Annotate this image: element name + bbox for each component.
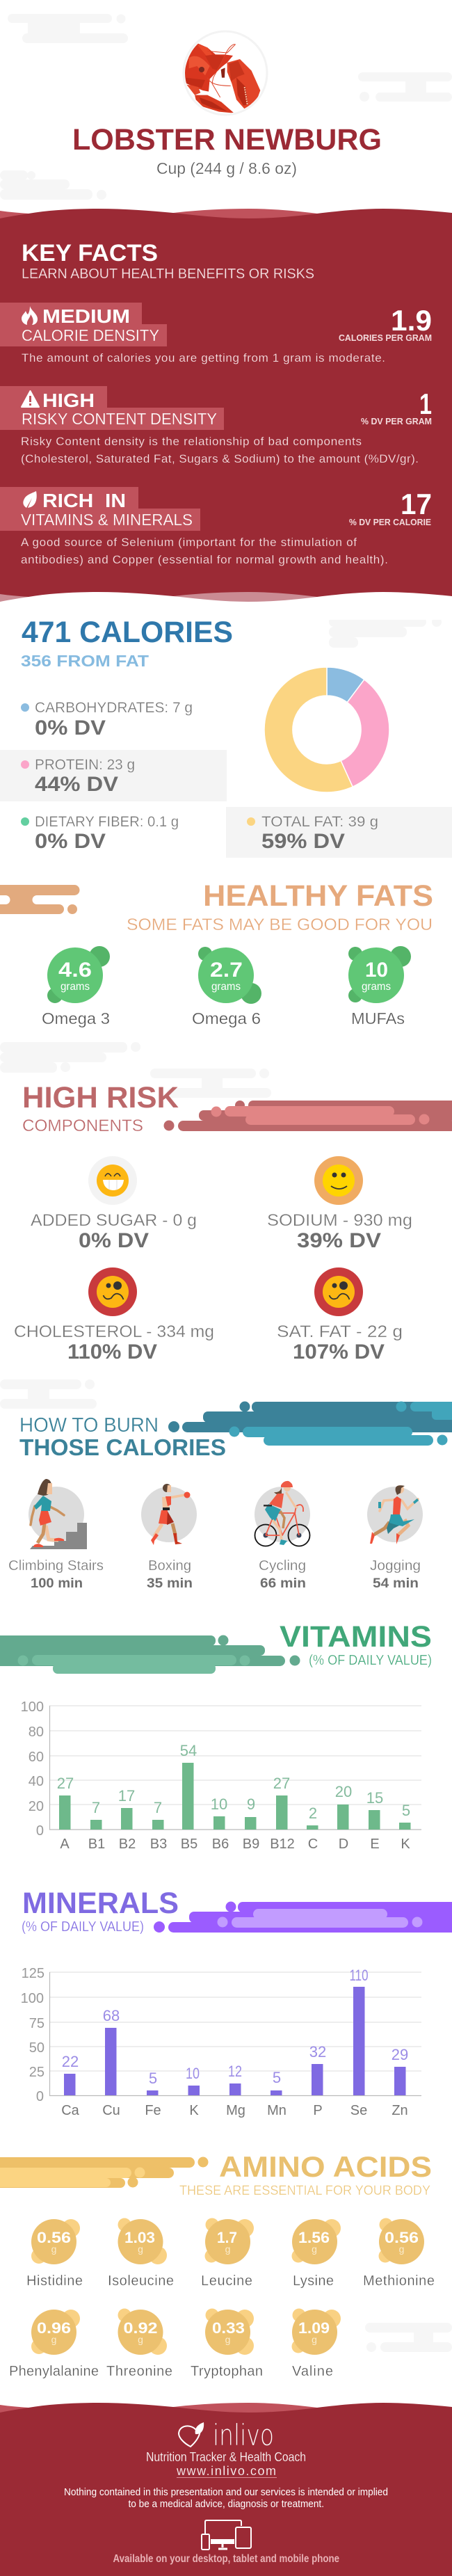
- legend: protein: 44% DV: [35, 773, 118, 796]
- title: LOBSTER NEWBURG: [72, 123, 382, 157]
- legend: dietary fiber: DIETARY FIBER: 0.1 g: [35, 814, 179, 830]
- legend: dietary fiber: [21, 814, 179, 853]
- legend: carbohydrates: 0% DV: [35, 717, 106, 739]
- amino: isoleucine: [108, 2218, 174, 2289]
- value: 1: 1: [419, 387, 432, 420]
- heading: MINERALS: [22, 1887, 179, 1920]
- heading line 2: THOSE CALORIES: [19, 1434, 226, 1460]
- unit: % dv per gram: % DV PER GRAM: [361, 416, 432, 426]
- bar chart: minerals: 0: [36, 2089, 44, 2104]
- amino: threonine: Threonine: [106, 2364, 172, 2379]
- bar chart: minerals: K: [189, 2103, 199, 2118]
- bar chart: vitamins: 100: [21, 1699, 44, 1715]
- stat: mufas: [348, 946, 411, 1027]
- amino: histidine: [26, 2219, 83, 2289]
- stat: mufas: grams: [362, 981, 391, 993]
- activity: climbing stairs: 100 min: [31, 1576, 83, 1591]
- bar chart: vitamins: 27: [273, 1775, 290, 1792]
- disclaimer: Nothing contained in this presentation and our services is intended or implied: [64, 2486, 388, 2498]
- amino: threonine: 0.92: [124, 2319, 157, 2337]
- bar chart: minerals: Cu: [102, 2103, 120, 2118]
- description: [21, 536, 388, 566]
- amino: valine: Valine: [292, 2364, 333, 2379]
- amino: threonine: [106, 2308, 172, 2379]
- item: sodium: 39% DV: [297, 1229, 381, 1252]
- bar chart: minerals: Mn: [267, 2103, 286, 2118]
- bar chart: minerals: 125: [22, 1966, 45, 1981]
- bar chart: minerals: 10: [186, 2065, 200, 2082]
- activity: jogging: 54 min: [373, 1576, 419, 1591]
- bar chart: vitamins: B1: [88, 1837, 105, 1852]
- bar chart: vitamins: 10: [211, 1795, 227, 1813]
- subheading: COMPONENTS: [22, 1117, 143, 1135]
- item: added sugar: ADDED SUGAR - 0 g: [31, 1211, 197, 1230]
- heading: key facts: KEY FACTS: [22, 240, 158, 266]
- bar chart: minerals: 75: [29, 2016, 45, 2031]
- value: 17: 17: [401, 488, 432, 520]
- bar chart: minerals: 25: [29, 2065, 45, 2080]
- unit: % dv per calorie: % DV PER CALORIE: [349, 517, 431, 527]
- item: added sugar: 0% DV: [79, 1229, 149, 1252]
- amino: histidine: g: [51, 2243, 56, 2255]
- amino: valine: 1.09: [298, 2319, 330, 2337]
- icon: devices: [202, 2520, 251, 2550]
- subheading: 356 from fat: 356 FROM FAT: [21, 652, 149, 670]
- panel: vitamins: [0, 1620, 432, 1852]
- activity: climbing stairs: Climbing Stairs: [8, 1558, 104, 1574]
- stat: mufas: 10: [365, 959, 388, 982]
- bar chart: vitamins: 17: [118, 1787, 135, 1805]
- description: The amount of calories you are getting from 1 gram is moderate.: [22, 351, 385, 365]
- logo: inlivo heart: [179, 2422, 204, 2447]
- bar chart: vitamins: 9: [247, 1795, 255, 1813]
- bar chart: minerals: 110: [349, 1967, 369, 1984]
- panel: how to burn: [8, 1401, 452, 1591]
- amino: tryptophan: g: [225, 2334, 230, 2345]
- bar chart: vitamins: K: [401, 1837, 410, 1852]
- stat: omega 3: grams: [60, 981, 90, 993]
- bar chart: minerals: 100: [21, 1991, 44, 2006]
- amino: leucine: Leucine: [201, 2273, 252, 2289]
- stat: mufas: MUFAs: [351, 1009, 405, 1027]
- amino: phenylalanine: g: [51, 2334, 56, 2345]
- amino: methionine: g: [399, 2243, 404, 2255]
- subheading: LEARN ABOUT HEALTH BENEFITS OR RISKS: [22, 266, 314, 282]
- amino: isoleucine: 1.03: [124, 2229, 155, 2246]
- activity: climbing stairs: [8, 1479, 104, 1591]
- amino: threonine: g: [138, 2334, 143, 2345]
- bar chart: vitamins: B9: [243, 1837, 259, 1852]
- bar chart: vitamins: 27: [57, 1775, 74, 1792]
- amino: methionine: [363, 2218, 435, 2289]
- bar chart: vitamins: 54: [180, 1742, 197, 1759]
- rating: rich in: RICH IN: [42, 490, 126, 511]
- fact: calorie density: [0, 303, 432, 365]
- item: added sugar: [31, 1156, 197, 1252]
- description: antibodies) and Copper (essential for normal growth and health).: [21, 553, 388, 566]
- amino: isoleucine: g: [138, 2243, 143, 2255]
- bar chart: vitamins: B5: [181, 1837, 197, 1852]
- bar chart: vitamins: 60: [29, 1750, 44, 1765]
- donut chart: [264, 667, 389, 792]
- bar chart: vitamins: 20: [335, 1783, 352, 1800]
- subheading: (% OF DAILY VALUE): [22, 1919, 144, 1935]
- bar chart: minerals: 68: [103, 2007, 120, 2024]
- disclaimer: to be a medical advice, diagnosis or treatment.: [128, 2498, 324, 2510]
- bar chart: minerals: 22: [62, 2053, 79, 2070]
- heading: VITAMINS: [280, 1620, 432, 1654]
- rating: medium: MEDIUM: [42, 305, 130, 327]
- website link: www.inlivo.com: [176, 2464, 276, 2478]
- panel: footer: [0, 2403, 452, 2576]
- item: cholesterol: [14, 1267, 214, 1363]
- amino: methionine: Methionine: [363, 2273, 435, 2289]
- value: 1.9: 1.9: [391, 304, 432, 337]
- unit: calories per gram: CALORIES PER GRAM: [339, 333, 432, 343]
- amino: phenylalanine: Phenylalanine: [9, 2364, 99, 2379]
- bar chart: minerals: Zn: [392, 2103, 408, 2118]
- legend: dietary fiber: 0% DV: [35, 830, 106, 853]
- amino: valine: [292, 2308, 341, 2379]
- amino: lysine: Lysine: [293, 2273, 334, 2289]
- amino: lysine: g: [312, 2243, 317, 2255]
- bar chart: vitamins: 20: [29, 1799, 44, 1814]
- amino: lysine: [292, 2219, 341, 2289]
- bar chart: vitamins: 80: [29, 1725, 44, 1740]
- bar chart: vitamins: 7: [92, 1799, 100, 1816]
- icon: warning triangle: [22, 391, 39, 407]
- bar chart: vitamins: B2: [119, 1837, 136, 1852]
- bar chart: vitamins: C: [308, 1837, 318, 1852]
- amino: methionine: 0.56: [385, 2229, 419, 2246]
- amino: leucine: 1.7: [217, 2229, 237, 2246]
- stat: omega 6: Omega 6: [192, 1009, 261, 1027]
- amino: tryptophan: Tryptophan: [191, 2364, 263, 2379]
- panel: high risk: [14, 1081, 452, 1363]
- heading: AMINO ACIDS: [219, 2150, 432, 2183]
- activity: cycling: 66 min: [260, 1576, 306, 1591]
- label: calorie density: CALORIE DENSITY: [22, 326, 159, 344]
- bar chart: minerals: Se: [350, 2103, 367, 2118]
- amino: histidine: Histidine: [26, 2273, 83, 2289]
- rating: high: HIGH: [42, 390, 95, 411]
- fact: rich in vitamins and minerals: [0, 487, 432, 566]
- legend: total fat: TOTAL FAT: 39 g: [261, 814, 378, 830]
- subheading: (% OF DAILY VALUE): [309, 1653, 432, 1668]
- activity: boxing: [141, 1484, 197, 1591]
- activity: cycling: [255, 1481, 310, 1591]
- bar chart: vitamins: 5: [402, 1802, 410, 1819]
- amino: valine: g: [312, 2334, 317, 2345]
- label: vitamins and minerals: VITAMINS & MINERALS: [21, 511, 193, 529]
- item: sodium: [267, 1156, 412, 1252]
- heading: 471 calories: 471 CALORIES: [22, 616, 233, 649]
- amino: leucine: [201, 2218, 254, 2289]
- bar chart: vitamins: A: [60, 1837, 70, 1852]
- activity: boxing: 35 min: [147, 1576, 193, 1591]
- bar chart: minerals: Mg: [226, 2103, 245, 2118]
- heading: HIGH RISK: [22, 1081, 179, 1114]
- bar chart: minerals: Ca: [61, 2103, 80, 2118]
- bar chart: vitamins: 7: [154, 1799, 162, 1816]
- amino: leucine: g: [225, 2243, 230, 2255]
- subheading: SOME FATS MAY BE GOOD FOR YOU: [127, 915, 433, 934]
- bar chart: minerals: 5: [273, 2069, 281, 2086]
- activity: boxing: Boxing: [148, 1558, 191, 1574]
- panel: calories: [0, 616, 452, 858]
- bar chart: vitamins: 2: [309, 1805, 317, 1822]
- icon: flame: [22, 306, 38, 325]
- legend: carbohydrates: [21, 700, 193, 739]
- icon: leaf: [23, 491, 37, 508]
- item: saturated fat: SAT. FAT - 22 g: [277, 1322, 403, 1341]
- activity: jogging: [367, 1485, 423, 1591]
- bar chart: minerals: 12: [228, 2063, 242, 2080]
- description: (Cholesterol, Saturated Fat, Sugars & Sodium) to the amount (%DV/gr).: [21, 452, 419, 465]
- label: risky content density: RISKY CONTENT DENSITY: [22, 410, 217, 428]
- food photo: lobster: [184, 31, 267, 115]
- legend: protein: [21, 757, 135, 796]
- amino: phenylalanine: 0.96: [37, 2319, 71, 2337]
- fact: risky content density: [0, 386, 432, 465]
- amino: tryptophan: [191, 2308, 263, 2379]
- legend: total fat: [247, 814, 378, 853]
- logo: inlivo wordmark: inlivo: [213, 2418, 274, 2452]
- bar chart: vitamins: D: [339, 1837, 348, 1852]
- bar chart: vitamins: B6: [212, 1837, 229, 1852]
- item: cholesterol: 110% DV: [67, 1341, 157, 1363]
- stat: omega 6: grams: [211, 981, 241, 993]
- stat: omega 3: 4.6: [58, 959, 92, 982]
- amino: histidine: 0.56: [37, 2229, 71, 2246]
- bar chart: vitamins: E: [370, 1837, 380, 1852]
- bar chart: vitamins: B3: [150, 1837, 167, 1852]
- panel: minerals: [21, 1887, 452, 2118]
- stat: omega 3: [42, 946, 110, 1027]
- item: saturated fat: 107% DV: [293, 1341, 385, 1363]
- bar chart: minerals: 32: [309, 2043, 326, 2061]
- bar chart: vitamins: B12: [270, 1837, 295, 1852]
- amino: lysine: 1.56: [298, 2229, 330, 2246]
- amino: tryptophan: 0.33: [212, 2319, 245, 2337]
- bar chart: minerals: 5: [149, 2070, 157, 2087]
- stat: omega 6: 2.7: [210, 959, 243, 982]
- bar chart: vitamins: [21, 1699, 421, 1852]
- bar chart: vitamins: 0: [36, 1823, 44, 1839]
- panel: amino acids: [0, 2150, 435, 2379]
- bar chart: vitamins: 15: [366, 1789, 383, 1807]
- bar chart: minerals: [21, 1966, 421, 2118]
- stat: omega 3: Omega 3: [42, 1009, 110, 1027]
- legend: carbohydrates: CARBOHYDRATES: 7 g: [35, 700, 193, 716]
- tagline: Nutrition Tracker & Health Coach: [146, 2450, 306, 2464]
- disclaimer: [64, 2486, 388, 2510]
- stat: omega 6: [192, 947, 261, 1027]
- heading line 1: HOW TO BURN: [19, 1414, 159, 1437]
- heading: HEALTHY FATS: [203, 879, 433, 913]
- bar chart: minerals: Fe: [145, 2103, 161, 2118]
- bar chart: minerals: P: [313, 2103, 323, 2118]
- legend: total fat: 59% DV: [261, 830, 345, 853]
- amino: phenylalanine: [9, 2310, 99, 2379]
- availability note: Available on your desktop, tablet and mobile phone: [113, 2553, 339, 2565]
- description: A good source of Selenium (important for the stimulation of: [21, 536, 357, 549]
- activity: cycling: Cycling: [259, 1558, 306, 1574]
- panel: key facts: [0, 209, 452, 620]
- legend: protein: PROTEIN: 23 g: [35, 757, 135, 773]
- item: sodium: SODIUM - 930 mg: [267, 1211, 412, 1230]
- activity: jogging: Jogging: [370, 1558, 421, 1574]
- subheading: THESE ARE ESSENTIAL FOR YOUR BODY: [179, 2184, 430, 2198]
- serving size: Cup (244 g / 8.6 oz): [156, 159, 297, 177]
- item: cholesterol: CHOLESTEROL - 334 mg: [14, 1322, 214, 1341]
- bar chart: minerals: 50: [29, 2040, 45, 2056]
- bar chart: vitamins: 40: [29, 1774, 44, 1789]
- amino: isoleucine: Isoleucine: [108, 2273, 174, 2289]
- bar chart: minerals: 29: [392, 2046, 408, 2063]
- item: saturated fat: [277, 1267, 403, 1363]
- description: Risky Content density is the relationship of bad components: [21, 435, 362, 448]
- panel: healthy fats: [0, 879, 433, 1027]
- description: [21, 435, 419, 465]
